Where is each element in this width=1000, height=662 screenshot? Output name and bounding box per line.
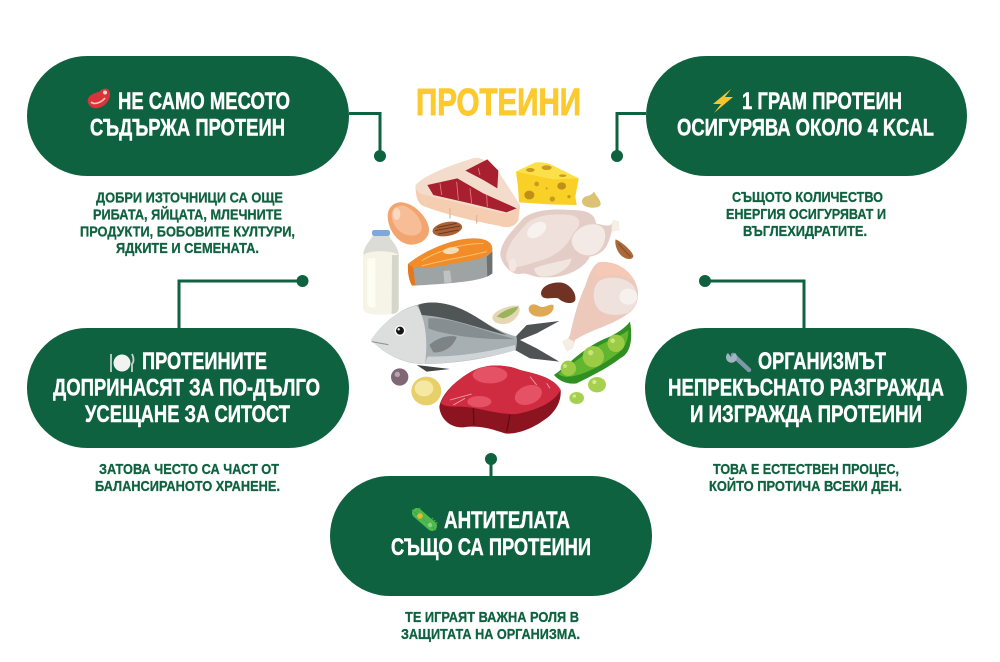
connector: not only meat xyxy=(349,114,386,162)
heading: antibodies: СЪЩО СА ПРОТЕИНИ xyxy=(391,534,591,561)
heading: not only meat: СЪДЪРЖА ПРОТЕИН xyxy=(90,114,285,142)
heading: satiety xyxy=(53,348,320,428)
panel: satiety xyxy=(27,275,349,495)
text: balanced diet xyxy=(95,461,280,495)
text: balanced diet: ЗАТОВА ЧЕСТО СА ЧАСТ ОТ xyxy=(99,461,279,478)
heading: satiety: ПРОТЕИНИТЕ xyxy=(142,348,267,375)
icon: hazelnut xyxy=(582,192,601,208)
icon: microbe xyxy=(412,508,438,530)
text: same energy: ЕНЕРГИЯ ОСИГУРЯВАТ И xyxy=(726,206,886,223)
pill: antibodies xyxy=(330,476,652,596)
pill: one gram xyxy=(646,56,967,176)
icon: almond xyxy=(615,239,633,259)
icon: pistachio xyxy=(492,306,520,324)
heading: organism: ОРГАНИЗМЪТ xyxy=(758,348,886,375)
text: good sources: ПРОДУКТИ, БОБОВИТЕ КУЛТУРИ, xyxy=(80,224,295,240)
icon: steak xyxy=(88,89,110,108)
pill: satiety xyxy=(27,328,349,448)
heading: one gram: 1 ГРАМ ПРОТЕИН xyxy=(742,88,902,115)
icon: egg xyxy=(388,202,429,245)
text: protection xyxy=(401,609,580,643)
text: protection: ТЕ ИГРАЯТ ВАЖНА РОЛЯ В xyxy=(405,609,579,626)
icon: chicken xyxy=(500,210,619,277)
connector: one gram xyxy=(611,114,646,162)
heading: not only meat xyxy=(90,88,290,142)
pill: not only meat xyxy=(27,56,349,176)
panel: one gram of protein xyxy=(611,56,967,240)
heading: antibodies xyxy=(391,507,591,561)
text: natural process xyxy=(709,461,902,495)
icon: plate and cutlery xyxy=(111,354,134,372)
title: ПРОТЕИНИ xyxy=(416,82,581,124)
text: good sources: РИБАТА, ЯЙЦАТА, МЛЕЧНИТЕ xyxy=(93,206,282,224)
text: good sources: ЯДКИТЕ И СЕМЕНАТА. xyxy=(116,240,259,257)
text: natural process: ТОВА Е ЕСТЕСТВЕН ПРОЦЕС, xyxy=(713,461,899,478)
connector: organism xyxy=(699,275,804,328)
text: natural process: КОЙТО ПРОТИЧА ВСЕКИ ДЕН. xyxy=(709,477,902,495)
heading: organism xyxy=(668,348,944,428)
icon: pecan xyxy=(431,220,463,238)
icon: salmon steak xyxy=(408,238,492,286)
text: same energy: ВЪГЛЕХИДРАТИТЕ. xyxy=(743,223,867,240)
icon: t-bone steak xyxy=(416,158,520,227)
icon: fish xyxy=(371,303,559,372)
panel: not only meat xyxy=(27,56,386,257)
icon: wrench xyxy=(726,353,749,370)
text: same energy: СЪЩОТО КОЛИЧЕСТВО xyxy=(732,189,883,206)
heading: satiety: УСЕЩАНЕ ЗА СИТОСТ xyxy=(85,401,290,428)
icon: cheese xyxy=(516,162,579,205)
heading: satiety: ДОПРИНАСЯТ ЗА ПО-ДЪЛГО xyxy=(53,374,320,402)
panel: antibodies xyxy=(330,453,652,643)
heading: antibodies: АНТИТЕЛАТА xyxy=(444,507,570,534)
text: good sources: ДОБРИ ИЗТОЧНИЦИ СА ОЩЕ xyxy=(96,190,283,206)
icon: milk bottle xyxy=(363,230,399,314)
icon: red meat xyxy=(439,365,561,434)
heading: one gram xyxy=(677,88,934,142)
connector: satiety xyxy=(179,275,308,328)
connector: antibodies xyxy=(485,453,497,476)
heading: organism: И ИЗГРАЖДА ПРОТЕИНИ xyxy=(690,401,922,428)
heading: not only meat: НЕ САМО МЕСОТО xyxy=(118,88,290,115)
text: same energy xyxy=(726,189,886,240)
icon: pea pod xyxy=(554,322,631,384)
illustration: protein foods xyxy=(363,158,638,434)
panel: organism xyxy=(645,275,967,495)
text: protection: ЗАЩИТАТА НА ОРГАНИЗМА. xyxy=(401,626,580,643)
text: balanced diet: БАЛАНСИРАНОТО ХРАНЕНЕ. xyxy=(95,478,280,495)
icon: cashew xyxy=(529,304,554,317)
pill: organism xyxy=(645,328,967,448)
icon: lightning bolt xyxy=(713,89,733,113)
icon: kidney bean xyxy=(541,282,576,303)
icon: purple bean xyxy=(391,368,408,386)
icon: yellow potato xyxy=(411,377,441,405)
text: good sources xyxy=(80,190,295,257)
icon: chicken leg xyxy=(562,262,638,352)
icon: green peas xyxy=(569,377,606,404)
